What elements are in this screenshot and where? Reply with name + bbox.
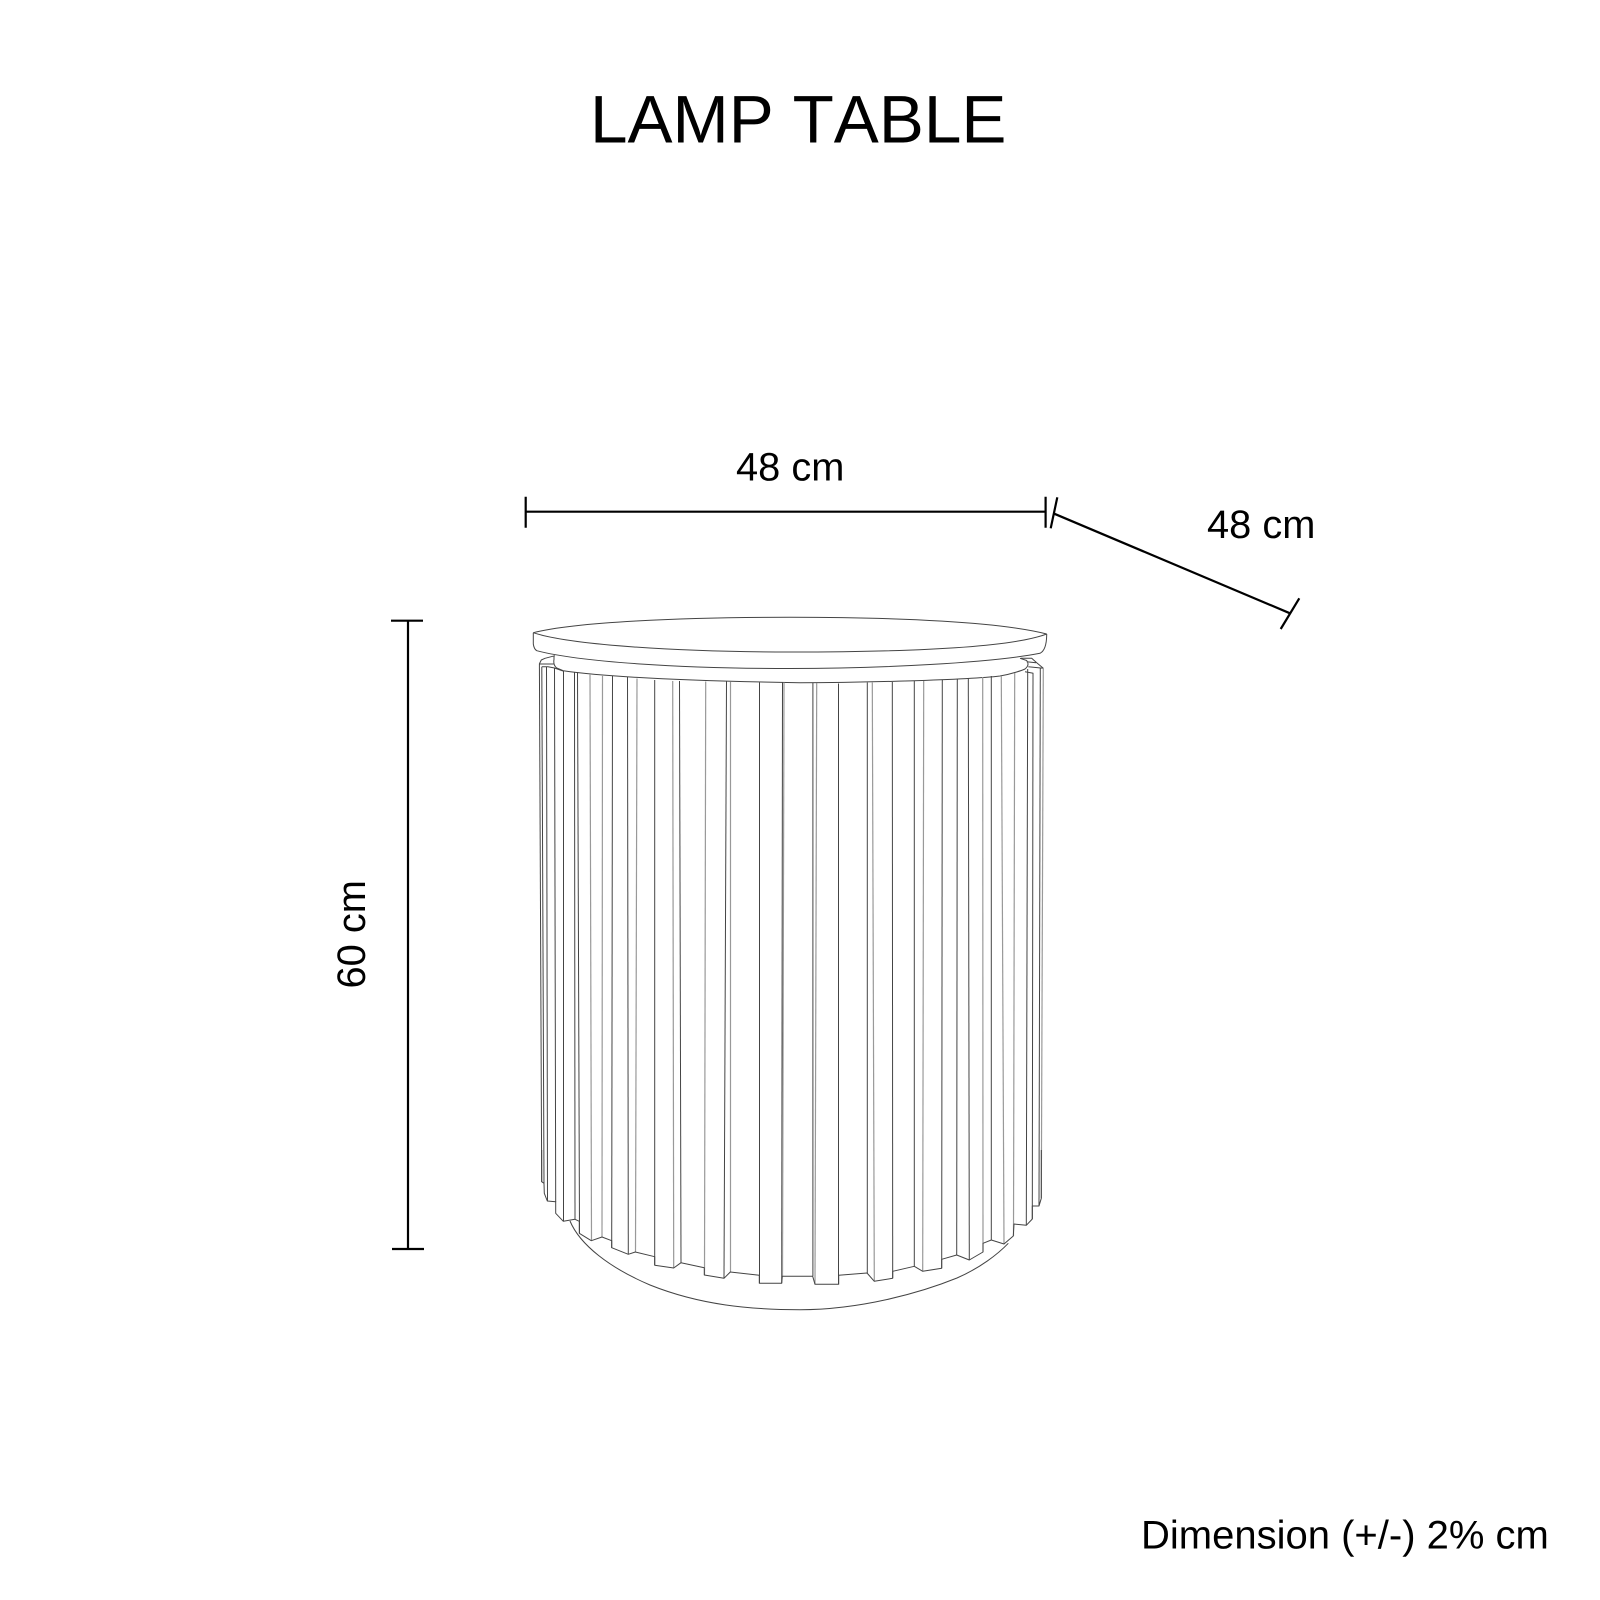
width label: 48 cm [736, 446, 844, 490]
title: LAMP TABLE [590, 83, 1006, 158]
dimension tolerance note: Dimension (+/-) 2% cm [1141, 1513, 1549, 1557]
height dimension [330, 621, 424, 1249]
fluted column slats [539, 664, 1043, 1284]
left corner detail [539, 656, 563, 671]
depth measure line [1051, 497, 1299, 629]
round base [570, 1221, 1008, 1310]
height label: 60 cm [330, 880, 374, 988]
lower ring under top [554, 656, 1028, 683]
width measure line [526, 497, 1046, 528]
depth dimension [1051, 497, 1315, 629]
right corner detail [1021, 658, 1043, 673]
height measure line [391, 621, 424, 1249]
column bottom profile [542, 1150, 1041, 1284]
lamp table drawing [533, 617, 1047, 1310]
table top [533, 617, 1047, 668]
width dimension [526, 446, 1046, 528]
depth label: 48 cm [1207, 503, 1315, 547]
